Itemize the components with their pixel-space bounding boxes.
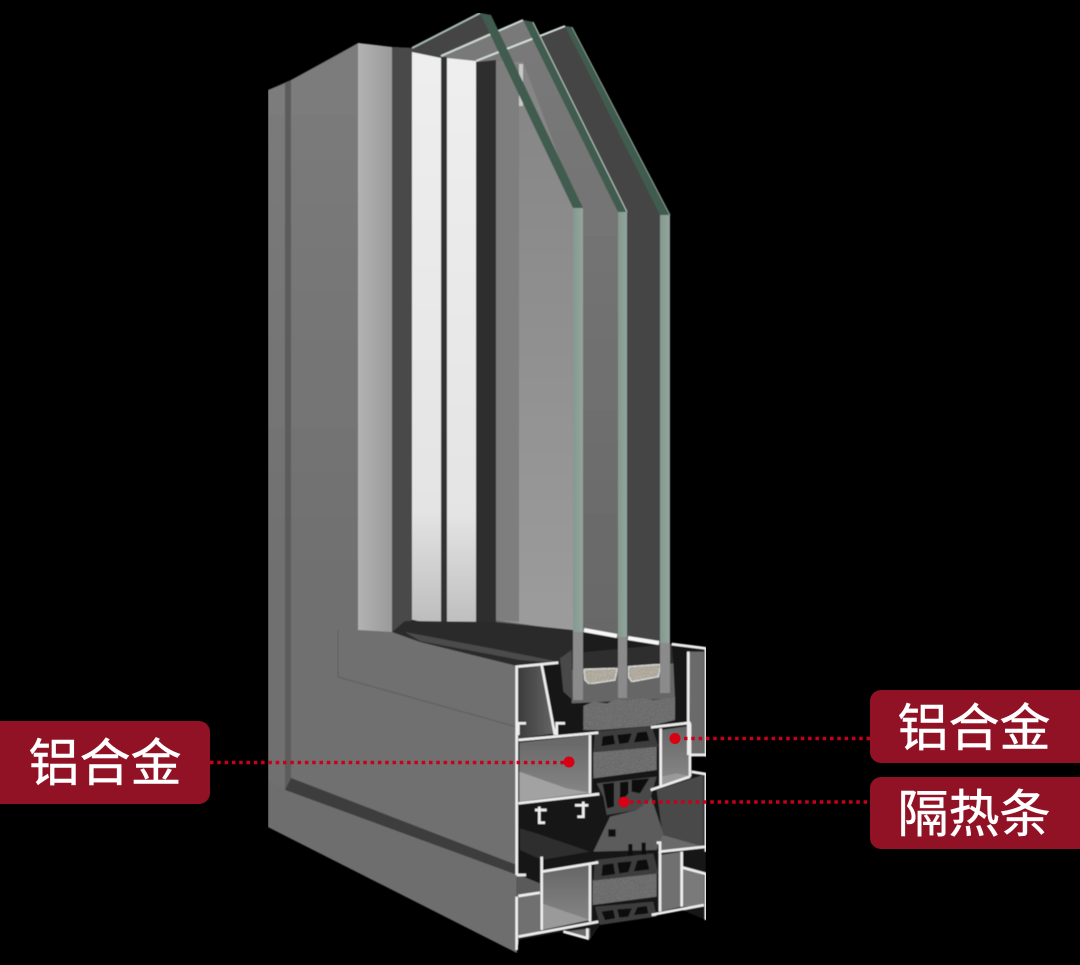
label: right aluminium [870, 690, 1080, 763]
insulating foam blocks [583, 697, 675, 905]
triple glazing panes [412, 13, 670, 660]
inner white frame strips [412, 52, 496, 630]
label: thermal break strip [870, 777, 1080, 849]
glazing rebate [560, 644, 675, 703]
pane bottoms inside section [573, 632, 670, 700]
profile cross-section [517, 644, 706, 950]
label: left aluminium: 铝合金 [28, 735, 182, 792]
window illustration [268, 13, 706, 953]
label: left aluminium [0, 721, 210, 804]
glass edges [480, 13, 670, 700]
window sill [392, 621, 706, 668]
leader: left aluminium [210, 756, 574, 768]
label: right aluminium: 铝合金 [897, 700, 1051, 757]
thermal break bars [593, 726, 663, 925]
foam spacers [584, 664, 661, 684]
window frame profile [268, 43, 540, 953]
aluminium section outlines [517, 644, 706, 950]
label: thermal break strip: 隔热条 [897, 786, 1051, 843]
leader: thermal break [618, 796, 870, 808]
leader: right aluminium [670, 733, 870, 744]
